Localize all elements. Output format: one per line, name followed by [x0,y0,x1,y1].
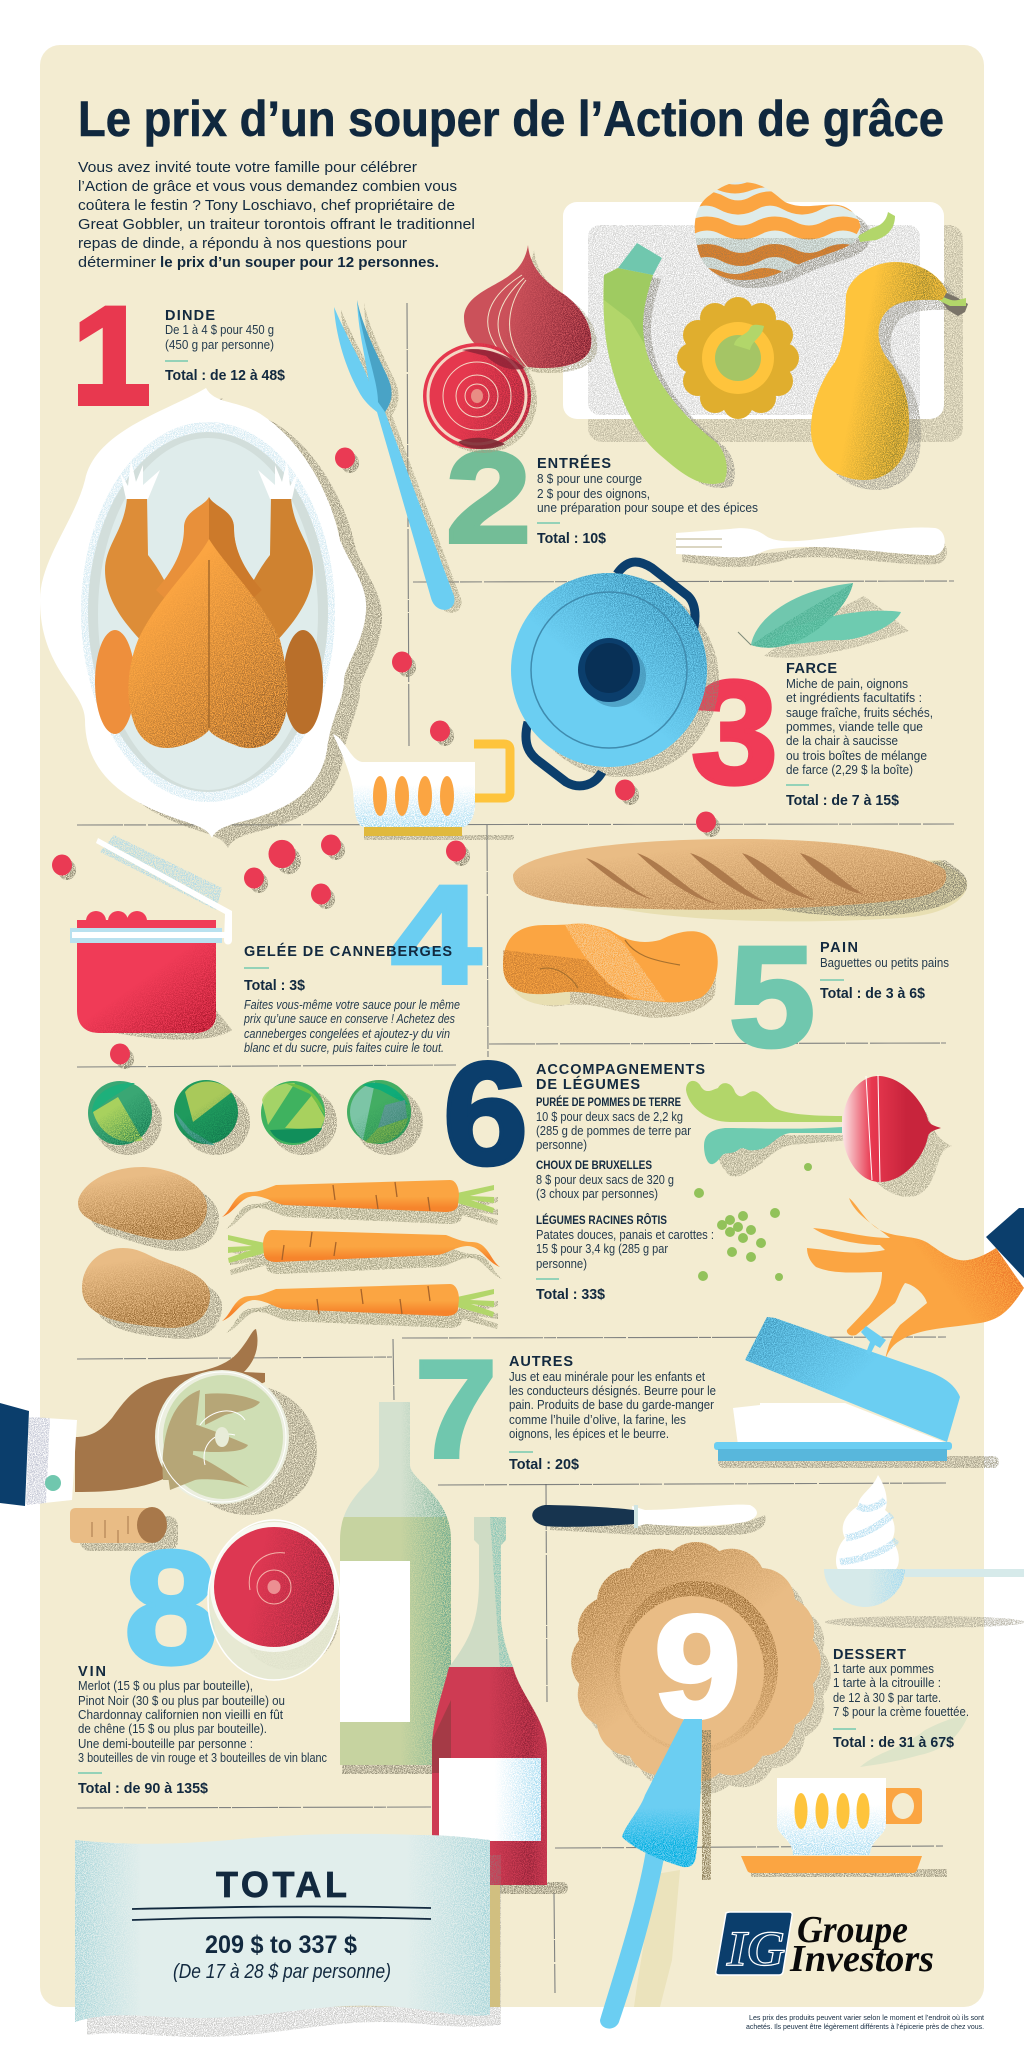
farce text: Miche de pain, oignons [786,676,908,691]
text: dinde [165,308,286,384]
vin text: Chardonnay californien non vieilli en fût [78,1707,283,1722]
accompagnements text: Patates douces, panais et carottes : [536,1227,714,1242]
intro text: Vous avez invité toute votre famille pour célébrer [78,159,417,176]
autres text: AUTRES [509,1354,573,1370]
footnote: achetés. Ils peuvent être légèrement différents à l’épicerie près de chez vous. [746,2022,984,2031]
onion [464,245,597,373]
vin text: Une demi-bouteille par personne : [78,1736,253,1751]
beet slice [423,343,537,453]
green wine bottle [340,1402,451,1774]
farce text: de la chair à saucisse [786,733,898,748]
carrots [222,1180,502,1333]
whipped cream on spoon [824,1475,1024,1628]
accompagnements text: ACCOMPAGNEMENTS [536,1062,705,1078]
farce text: FARCE [786,661,837,677]
gelée text: blanc et du sucre, puis faites cuire le tout. [244,1040,444,1055]
vin text: VIN [78,1664,106,1680]
yellow gourd [811,262,968,490]
pain text [820,940,949,1002]
IG logo: Investors [789,1938,934,1980]
footnote: Les prix des produits peuvent varier selon le moment et l’endroit où ils sont [749,2013,985,2022]
total per person: (De 17 à 28 $ par personne) [173,1961,391,1983]
dessert text: 1 tarte à la citrouille : [833,1675,941,1690]
text: dinde: DINDE [165,308,215,324]
text: dinde: Total : de 12 à 48$ [165,367,286,384]
blue carving fork [334,300,461,613]
orange hand with navy cuff [807,1198,1024,1360]
autres text: oignons, les épices et le beurre. [509,1426,669,1441]
accompagnements text: personne) [536,1256,587,1271]
entrées text: une préparation pour soupe et des épices [537,500,758,515]
brussels sprouts [88,1080,423,1155]
number 6: 6 [443,1032,528,1195]
number 5: 5 [729,918,815,1077]
turkey body [128,539,288,748]
accompagnements text: 10 $ pour deux sacs de 2,2 kg [536,1109,683,1124]
entrées text: 2 $ pour des oignons, [537,486,650,501]
turkey back arms [105,497,313,650]
number 9: 9 [654,1585,741,1748]
accompagnements text: 15 $ pour 3,4 kg (285 g par [536,1241,669,1256]
carrot 2 [228,1230,502,1279]
farce text: sauge fraîche, fruits séchés, [786,705,933,720]
number 2: 2 [446,426,531,570]
dessert text: 7 $ pour la crème fouettée. [833,1704,969,1719]
turkey on platter [40,388,382,848]
text: dinde: De 1 à 4 $ pour 450 g [165,322,274,337]
pain text: Total : de 3 à 6$ [820,985,926,1002]
pale leaf ghost [860,1716,968,1767]
IG logo [716,1909,934,1980]
sage leaves [738,583,909,658]
hand-drawn grid lines [77,303,954,1993]
intro text [78,159,475,271]
number 1: 1 [72,277,150,434]
gelée text: prix qu’une sauce en conserve ! Achetez des [243,1011,455,1026]
footnote [746,2013,985,2031]
accompagnements text: personne) [536,1137,587,1152]
total rules [132,1906,431,1920]
number 3: 3 [691,651,778,815]
entrées text [537,455,758,547]
dark hand holding glass [0,1329,317,1515]
intro text: déterminer [78,254,156,271]
red wine bottle [432,1517,568,1894]
entrées text: Total : 10$ [537,530,607,547]
cork [70,1507,178,1551]
number 7: 7 [415,1332,497,1487]
autres text: les conducteurs désignés. Beurre pour le [509,1383,716,1398]
accompagnements text: CHOUX DE BRUXELLES [536,1160,652,1172]
entrées text: ENTRÉES [537,455,611,472]
farce text: Total : de 7 à 15$ [786,792,900,809]
carrot 3 [222,1284,498,1333]
coffee cup [741,1778,947,1877]
accompagnements text: LÉGUMES RACINES RÔTIS [536,1214,667,1227]
entrées text: 8 $ pour une courge [537,471,642,486]
total heading: TOTAL [216,1864,347,1905]
vin text: de chêne (15 $ ou plus par bouteille). [78,1721,267,1736]
butter dish [714,1317,999,1468]
scalloped squash [677,297,799,419]
intro text: le prix d’un souper pour 12 personnes. [160,254,439,271]
striped gourd [690,182,895,288]
autres text: pain. Produits de base du garde-manger [509,1397,715,1412]
autres text: comme l’huile d’olive, la farine, les [509,1412,686,1427]
IG logo: Groupe [797,1909,908,1951]
pain text: PAIN [820,940,858,956]
farce text: pommes, viande telle que [786,719,923,734]
intro text: l’Action de grâce et vous vous demandez combien vous [78,178,457,195]
gelée text: canneberges congelées et ajoutez-y du vin [244,1026,450,1041]
accompagnements text: PURÉE DE POMMES DE TERRE [536,1096,681,1109]
accompagnements text: (285 g de pommes de terre par [536,1123,692,1138]
pie [571,1542,831,1794]
baguette [513,839,967,921]
farce text: et ingrédients facultatifs : [786,690,922,705]
intro text: coûtera le festin ? Tony Loschiavo, chef propriétaire de [78,197,455,214]
accompagnements text: (3 choux par personnes) [536,1186,658,1201]
vin text: Pinot Noir (30 $ ou plus par bouteille) ou [78,1693,285,1708]
zucchini [603,243,735,488]
cranberry jar [70,835,232,1040]
number 4: 4 [391,856,481,1013]
wine glass [208,1520,340,1680]
autres text [509,1354,716,1473]
squash board [563,202,963,442]
peas [694,1163,812,1281]
dessert text: de 12 à 30 $ par tarte. [833,1690,941,1705]
dessert text: 1 tarte aux pommes [833,1661,934,1676]
potatoes [78,1167,222,1339]
number 8: 8 [124,1518,218,1698]
gelée text: Total : 3$ [244,977,306,994]
dessert text: DESSERT [833,1647,906,1663]
gravy boat [333,734,514,840]
pie server [600,1719,711,2029]
gelée text: Faites vous-même votre sauce pour le même [244,997,460,1012]
turkey wings [95,630,323,734]
turkey frills [120,460,298,499]
knife [532,1505,766,1535]
title: Le prix d’un souper de l’Action de grâce [78,91,944,147]
blue pot [511,562,719,786]
dessert text: Total : de 31 à 67$ [833,1734,955,1751]
text: dinde: (450 g par personne) [165,337,274,352]
accompagnements text [536,1062,714,1303]
white fork [676,527,947,567]
farce text [786,661,933,809]
accompagnements text: 8 $ pour deux sacs de 320 g [536,1172,674,1187]
farce text: de farce (2,29 $ la boîte) [786,762,913,777]
twist bread [503,924,718,1018]
total amount: 209 $ to 337 $ [205,1931,357,1959]
IG logo: IG [726,1920,785,1976]
intro text: repas de dinde, a répondu à nos questions pour [78,235,407,252]
dessert text [833,1647,969,1751]
radish with leaves [686,1075,952,1197]
intro text: Great Gobbler, un traiteur torontois offrant le traditionnel [78,216,475,233]
vin text: 3 bouteilles de vin rouge et 3 bouteilles de vin blanc [78,1750,327,1765]
gelée text [243,943,460,1055]
farce text: ou trois boîtes de mélange [786,748,927,763]
accompagnements text: DE LÉGUMES [536,1076,640,1093]
gelée text: GELÉE DE CANNEBERGES [244,943,452,960]
autres text: Total : 20$ [509,1456,580,1473]
pain text: Baguettes ou petits pains [820,955,949,970]
carrot 1 [222,1180,498,1229]
autres text: Jus et eau minérale pour les enfants et [509,1369,705,1384]
total box [75,1834,501,2037]
accompagnements text: Total : 33$ [536,1286,606,1303]
cranberries [52,448,720,1069]
vin text: Total : de 90 à 135$ [78,1780,209,1797]
vin text: Merlot (15 $ ou plus par bouteille), [78,1678,253,1693]
vin text [78,1664,327,1797]
